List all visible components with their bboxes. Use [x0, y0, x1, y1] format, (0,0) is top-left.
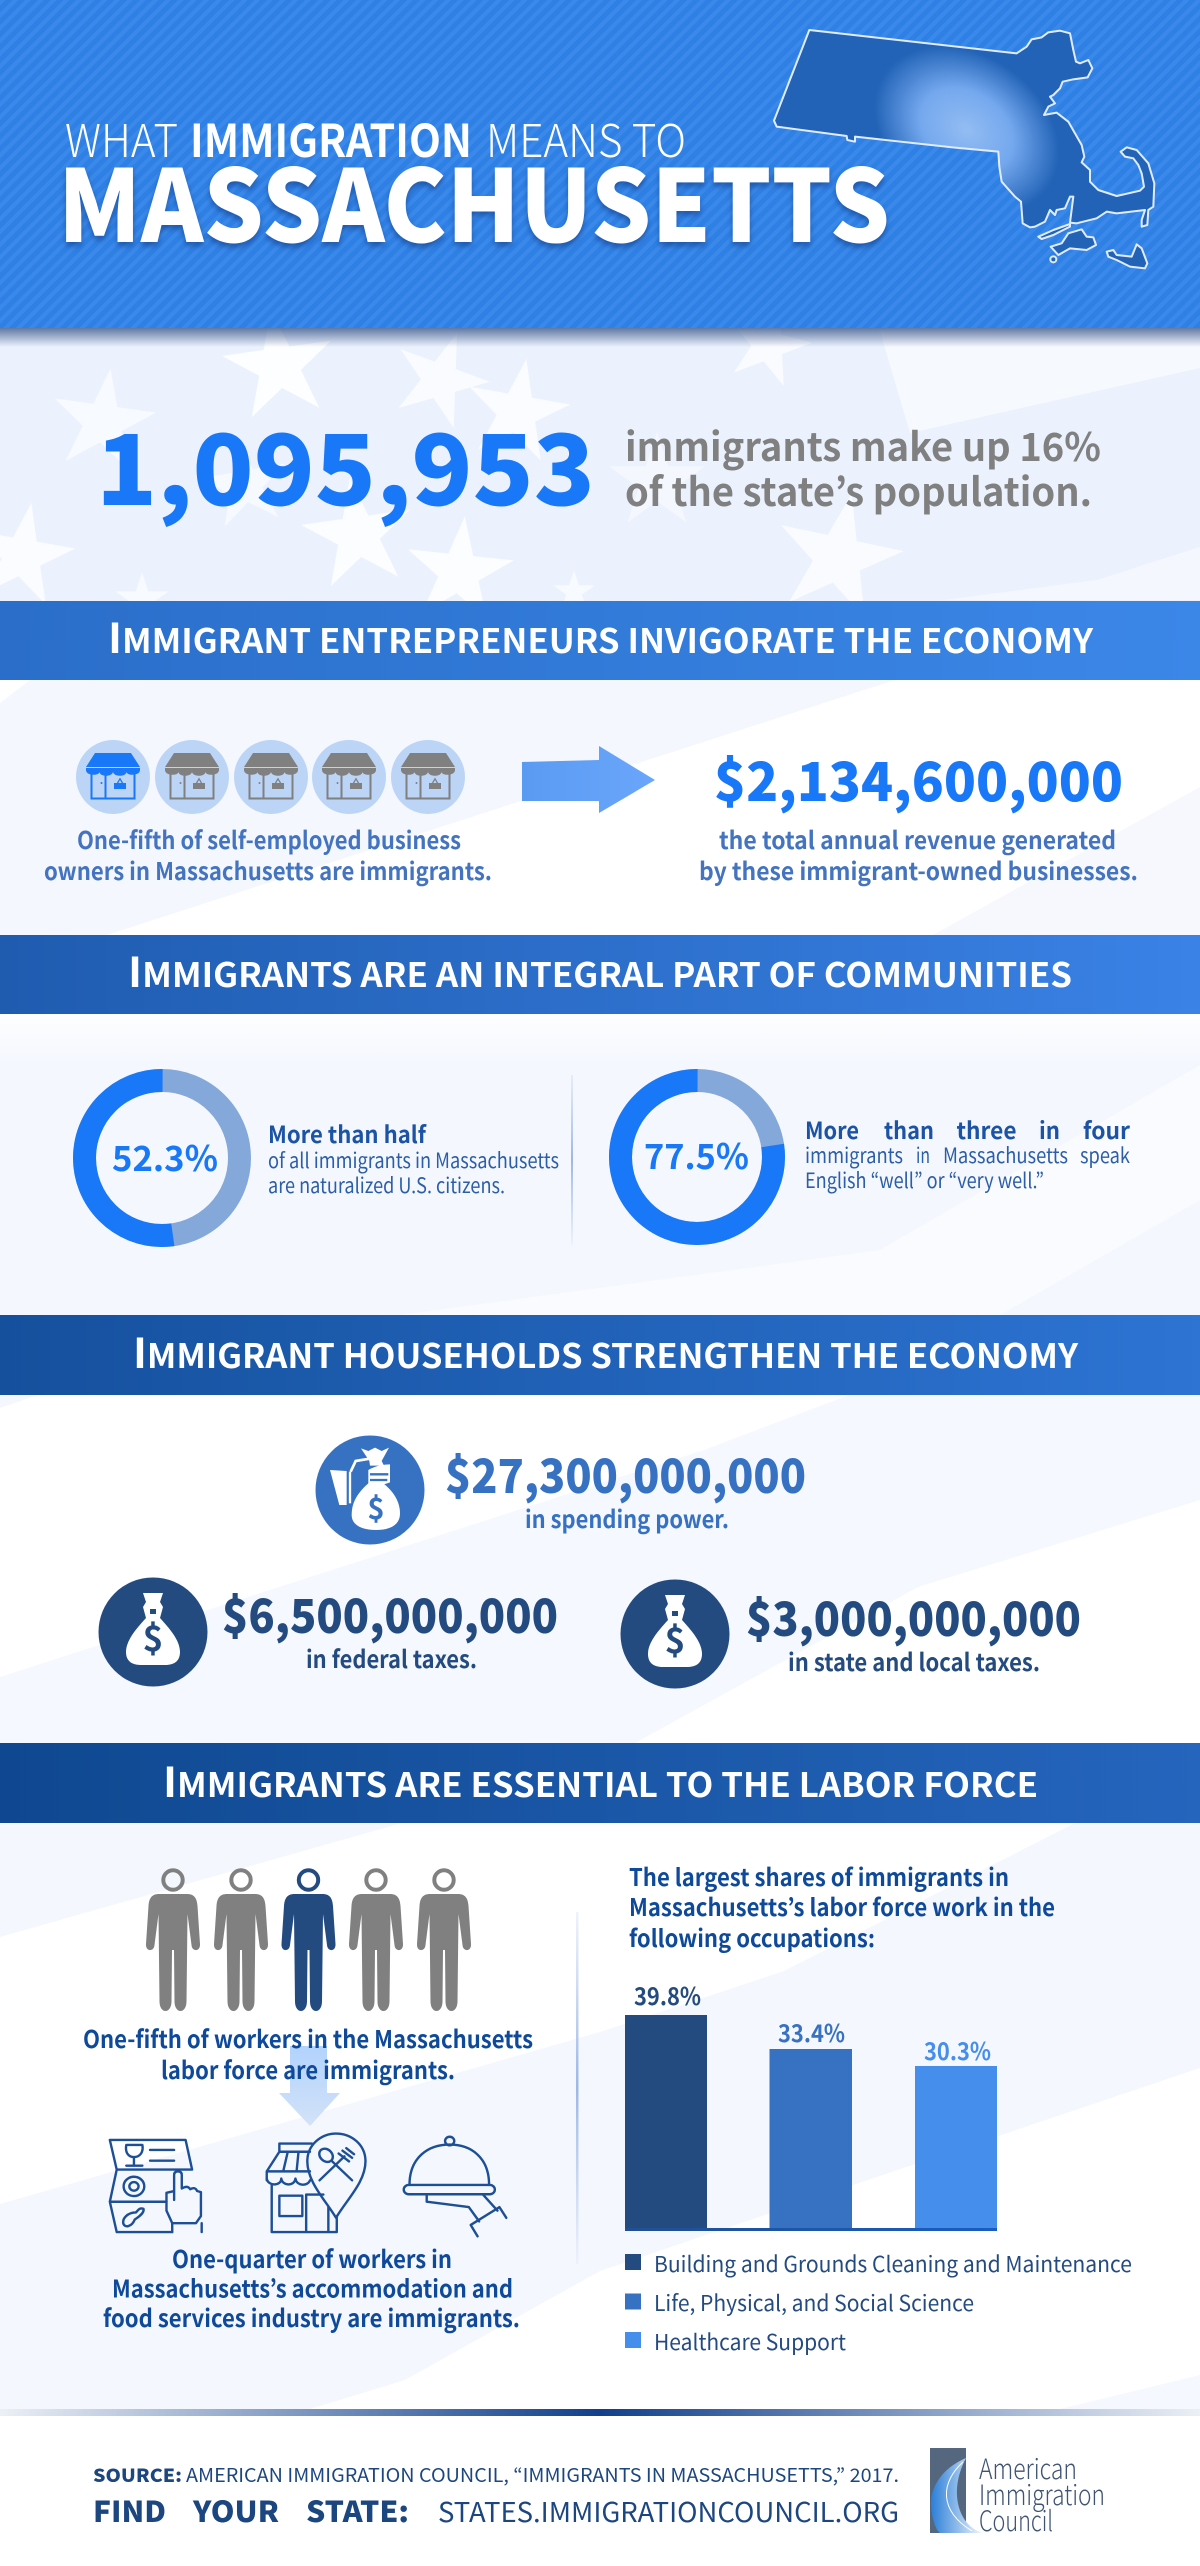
section heading: entrepreneurs: [0, 601, 1200, 680]
population text: [625, 417, 1101, 518]
spending power figure: in spending power.: [525, 1501, 729, 1536]
English proficiency text: in: [1039, 1112, 1060, 1146]
icon: hand holding money bag: $: [367, 1486, 385, 1528]
title line: WHAT: [65, 105, 178, 170]
logo: American Immigration Council: American: [979, 2448, 1077, 2488]
English proficiency text: Massachusetts: [943, 1140, 1068, 1170]
federal taxes figure: [222, 1578, 558, 1676]
source line: SOURCE:: [93, 2462, 182, 2488]
panel: communities: [84, 1075, 1131, 1245]
logo: American Immigration Council: Council: [979, 2500, 1053, 2540]
source line: AMERICAN IMMIGRATION COUNCIL, “IMMIGRANTS IN MASSACHUSETTS,” 2017.: [186, 2461, 899, 2488]
logo: American Immigration Council: [930, 2448, 1105, 2540]
population text: of the state’s population.: [625, 462, 1092, 518]
section heading: entrepreneurs: IMMIGRANT ENTREPRENEURS INVIGORATE THE ECONOMY: [108, 605, 1094, 665]
occupations intro text: following occupations:: [629, 1919, 875, 1954]
panel: state population: [0, 292, 1200, 623]
find your state line: FIND: [93, 2489, 166, 2531]
bar chart: 33.4%: [778, 2014, 845, 2049]
find your state line: YOUR: [192, 2489, 279, 2531]
workers text: labor force are immigrants.: [161, 2052, 455, 2087]
English proficiency text: [805, 1112, 1131, 1195]
revenue text: [699, 822, 1138, 888]
English proficiency text: immigrants: [805, 1140, 903, 1170]
section heading: households: [0, 1315, 1200, 1395]
footer: [0, 2409, 1200, 2566]
food services text: Massachusetts’s accommodation and: [112, 2270, 513, 2306]
business owners text: [44, 822, 492, 888]
English proficiency text: More: [805, 1112, 859, 1146]
chart legend: [625, 2247, 1132, 2357]
panel: labor force: [83, 1858, 1132, 2357]
icon: menu: [110, 2140, 202, 2232]
icon: money bag federal: $: [143, 1611, 163, 1662]
bar chart: [625, 1977, 997, 2231]
business owners text: One-fifth of self-employed business: [77, 822, 461, 857]
chart legend: Life, Physical, and Social Science: [654, 2286, 974, 2318]
icon: serving cloche: [404, 2137, 506, 2236]
icon: money bag state and local: $: [665, 1613, 685, 1664]
occupations intro text: The largest shares of immigrants in: [629, 1858, 1009, 1893]
revenue figure: $2,134,600,000: [714, 738, 1123, 817]
title state name: MASSACHUSETTS: [58, 126, 890, 271]
bar chart: 30.3%: [924, 2032, 991, 2067]
panel: households: [98, 1436, 1081, 1688]
state and local taxes figure: $3,000,000,000: [746, 1581, 1081, 1650]
occupations intro text: [629, 1858, 1055, 1954]
find your state line: STATE:: [306, 2489, 409, 2531]
English proficiency text: English “well” or “very well.”: [805, 1165, 1044, 1195]
big number: 1,095,953: [96, 392, 595, 534]
English proficiency text: four: [1083, 1112, 1131, 1146]
state and local taxes figure: in state and local taxes.: [788, 1644, 1040, 1679]
bar chart: 39.8%: [634, 1977, 701, 2012]
food services text: [103, 2241, 520, 2335]
logo: American Immigration Council: Immigration: [979, 2474, 1105, 2514]
food services text: One-quarter of workers in: [172, 2241, 452, 2276]
donut chart 52.3%: 52.3%: [112, 1131, 218, 1182]
business owners text: owners in Massachusetts are immigrants.: [44, 853, 492, 888]
spending power figure: [445, 1438, 806, 1536]
revenue text: by these immigrant-owned businesses.: [699, 853, 1138, 888]
food services text: food services industry are immigrants.: [103, 2300, 520, 2335]
federal taxes figure: in federal taxes.: [306, 1641, 477, 1676]
section heading: communities: [0, 935, 1200, 1014]
English proficiency text: in: [916, 1140, 930, 1170]
find your state line: [93, 2489, 899, 2531]
English proficiency text: than: [884, 1112, 934, 1146]
title line: MEANS TO: [486, 105, 686, 170]
icon: money bag state and local: [620, 1580, 730, 1688]
arrow right: [522, 746, 655, 813]
donut chart 77.5%: 77.5%: [644, 1129, 749, 1180]
icon: restaurant location: [267, 2134, 365, 2232]
chart legend: Healthcare Support: [654, 2325, 846, 2357]
English proficiency text: speak: [1080, 1140, 1130, 1170]
title line: IMMIGRATION: [190, 105, 472, 170]
panel: entrepreneurs: [44, 738, 1138, 888]
workers text: [83, 2021, 533, 2087]
find your state line: STATES.IMMIGRATIONCOUNCIL.ORG: [438, 2491, 899, 2530]
icon: hand holding money bag: [316, 1436, 424, 1544]
workers text: One-fifth of workers in the Massachusetts: [83, 2021, 533, 2056]
header banner: [0, 0, 1200, 328]
spending power figure: $27,300,000,000: [445, 1438, 806, 1507]
section heading: communities: IMMIGRANTS ARE AN INTEGRAL PART OF COMMUNITIES: [128, 939, 1072, 999]
donut chart 52.3%: [84, 1080, 240, 1236]
state and local taxes figure: [746, 1581, 1081, 1679]
naturalized citizens text: More than half: [268, 1116, 427, 1150]
section heading: labor force: [0, 1743, 1200, 1823]
arrow down: [279, 2046, 340, 2126]
naturalized citizens text: of all immigrants in Massachusetts: [268, 1145, 559, 1175]
naturalized citizens text: [268, 1116, 559, 1200]
English proficiency text: three: [956, 1112, 1016, 1146]
donut chart 77.5%: [620, 1080, 774, 1234]
naturalized citizens text: are naturalized U.S. citizens.: [268, 1170, 505, 1200]
occupations intro text: Massachusetts’s labor force work in the: [629, 1888, 1055, 1923]
store icons: [76, 740, 465, 814]
federal taxes figure: $6,500,000,000: [222, 1578, 558, 1647]
section heading: households: IMMIGRANT HOUSEHOLDS STRENGTHEN THE ECONOMY: [133, 1320, 1079, 1380]
map of Massachusetts: [774, 30, 1154, 268]
chart legend: Building and Grounds Cleaning and Maintenance: [654, 2247, 1132, 2279]
revenue text: the total annual revenue generated: [719, 822, 1116, 857]
icon: five workers: [146, 1870, 471, 2011]
icon: money bag federal: [98, 1578, 208, 1686]
section heading: labor force: IMMIGRANTS ARE ESSENTIAL TO THE LABOR FORCE: [163, 1749, 1038, 1809]
population text: immigrants make up 16%: [625, 417, 1101, 473]
